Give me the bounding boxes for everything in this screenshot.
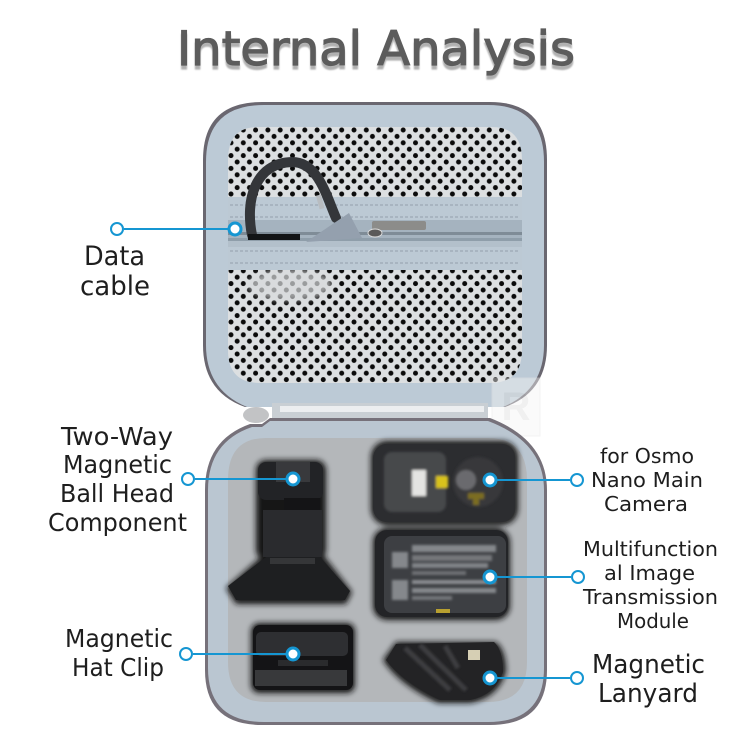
base shell: [205, 418, 547, 725]
label: magnetic lanyard: [592, 650, 705, 709]
label: hat clip: Magnetic: [65, 624, 173, 653]
panel: case base: [205, 418, 547, 725]
label: ball head component: Component: [48, 508, 187, 537]
label: data cable: cable: [80, 271, 150, 302]
label: osmo nano main camera: for Osmo: [600, 444, 694, 468]
callout: osmo nano: [484, 474, 583, 486]
panel: case lid with mesh pocket: [203, 102, 547, 407]
label: multifunctional image transmission module: al Image: [604, 561, 695, 585]
label: ball head component: Ball Head: [60, 479, 174, 508]
panel: hinge: [243, 403, 488, 427]
callout: lanyard: [484, 672, 583, 684]
label: multifunctional image transmission module: Module: [617, 609, 689, 633]
label: data cable: [80, 241, 150, 302]
callout: image transmission module: [484, 571, 584, 583]
mesh lining: [228, 127, 522, 383]
label: hat clip: Hat Clip: [72, 653, 164, 682]
callout: hat clip: [180, 648, 299, 660]
callout: ball head: [182, 473, 299, 485]
label: hat clip: [65, 624, 173, 682]
callout: data cable: [111, 223, 241, 235]
label: multifunctional image transmission module: Multifunction: [583, 537, 718, 561]
label: osmo nano main camera: [591, 444, 703, 516]
lid shell: [203, 102, 547, 407]
magnetic hat clip: [253, 625, 353, 690]
shadows: [226, 441, 518, 703]
mesh highlight: [248, 269, 332, 301]
label: multifunctional image transmission module: Transmission: [582, 585, 718, 609]
faint watermark: R: [502, 385, 531, 429]
zip pocket band: [228, 197, 522, 270]
padded interior: [228, 438, 527, 702]
title: Internal Analysis: [177, 22, 575, 77]
osmo nano main camera: [373, 444, 515, 522]
label: multifunctional image transmission module: [582, 537, 718, 633]
faint watermark: [492, 378, 540, 436]
data cable: [248, 162, 362, 242]
label: osmo nano main camera: Nano Main: [591, 468, 703, 492]
label: ball head component: Two-Way: [60, 422, 173, 451]
label: magnetic lanyard: Lanyard: [598, 679, 698, 709]
label: magnetic lanyard: Magnetic: [592, 650, 705, 680]
magnetic lanyard: [386, 642, 503, 700]
label: osmo nano main camera: Camera: [604, 492, 688, 516]
label: ball head component: [48, 422, 187, 537]
image transmission module: [375, 530, 508, 617]
title: Internal Analysis: [177, 26, 575, 81]
zipper pull: [368, 221, 426, 237]
label: data cable: Data: [84, 241, 145, 272]
ball head component: [228, 462, 350, 600]
label: ball head component: Magnetic: [63, 450, 172, 479]
